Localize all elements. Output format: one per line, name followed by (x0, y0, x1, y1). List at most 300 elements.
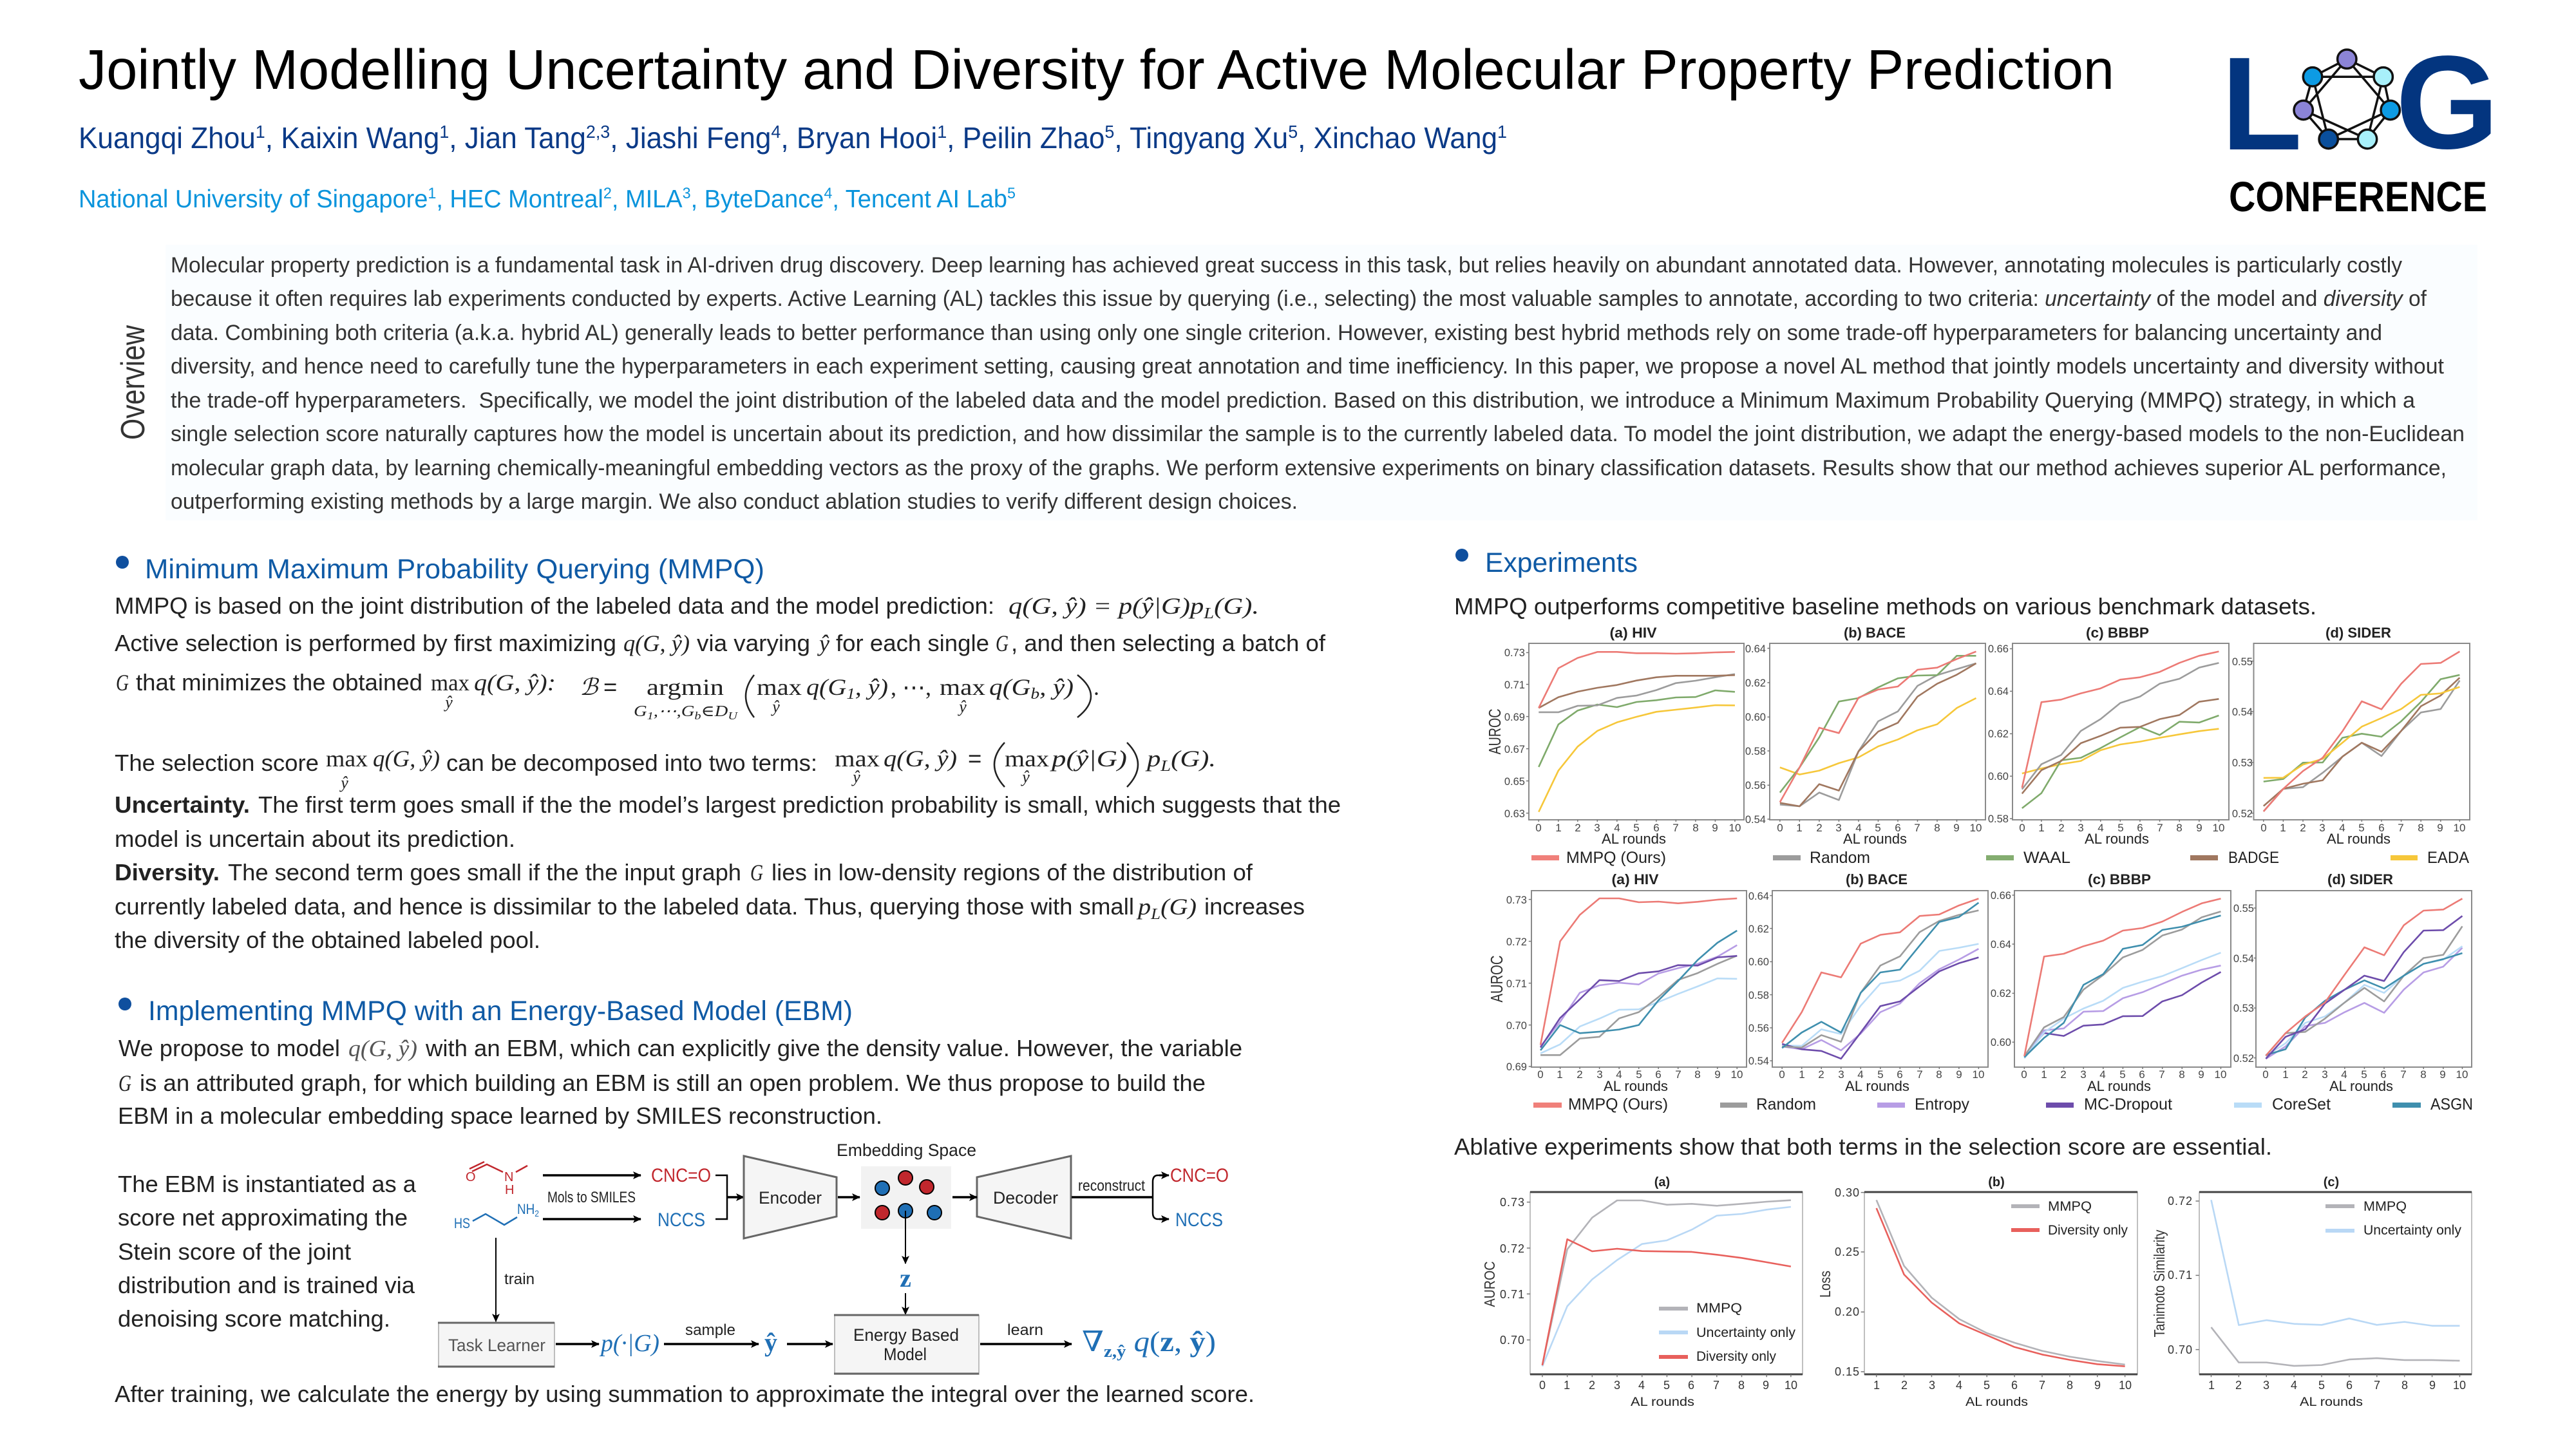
text: score net description: distribution and is trained via (118, 1272, 415, 1298)
chart: ablation c: 6 (2346, 1379, 2353, 1392)
chart: ablation b: Diversity only (2048, 1223, 2128, 1238)
chart: SIDER row 1: 9 (2437, 822, 2443, 834)
chart: BACE row 2: AL rounds (1845, 1078, 1909, 1094)
legend: row 2: MC-Dropout (2084, 1095, 2172, 1113)
energy based model box (834, 1315, 979, 1374)
overview text: outperforming existing methods by a large margin. We also conduct ablation studies to verify different design choices. (171, 489, 1298, 514)
chart: BACE row 1: 0 (1777, 822, 1783, 834)
chart: HIV row 1: AL rounds (1602, 831, 1666, 847)
text: joint distribution line: q(G, ŷ) = p(ŷ|G)p (1009, 593, 1173, 619)
authors: , Jiashi Feng (610, 121, 771, 155)
chart: HIV row 1 (1485, 625, 1744, 847)
chart: BACE row 1: 0.58 (1745, 746, 1766, 757)
formula: batch selection: . (1094, 674, 1099, 700)
formula: batch selection: max (757, 674, 802, 700)
chart: BBBP row 1: (c) BBBP (2086, 625, 2149, 641)
diagram: EBM pipeline (438, 1141, 1229, 1374)
chart: BACE row 1: 4 (1855, 822, 1862, 834)
text: joint distribution line: (G). (1214, 593, 1259, 619)
text: EBM intro: q(G, ŷ) (348, 1036, 417, 1061)
chart: SIDER row 1: 0.54 (2232, 706, 2253, 718)
formula: batch selection: argmin (647, 674, 724, 700)
chart: ablation b: 4 (1956, 1379, 1962, 1392)
text: uncertainty: The first term goes small if the the model’s largest prediction probability is small, which suggests that the (258, 791, 1341, 818)
formula: gradient: z,ŷ (1104, 1342, 1126, 1361)
legend: row 2 (1533, 1095, 2473, 1113)
chart: HIV row 2: 0.70 (1506, 1020, 1527, 1032)
chart: ablation c: 10 (2453, 1379, 2466, 1392)
smiles output: NCCS (1175, 1209, 1223, 1231)
formula: selection score decomposition: max (1005, 746, 1049, 772)
authors: Kuangqi Zhou (79, 121, 263, 155)
chart: BACE row 1: 5 (1875, 822, 1881, 834)
legend: row 2: CoreSet (2272, 1095, 2331, 1113)
chart: ablation b: 0.15 (1835, 1365, 1860, 1378)
chart: SIDER row 2: 0.52 (2233, 1053, 2254, 1065)
chart: ablation c: 2 (2235, 1379, 2242, 1392)
chart: SIDER row 2 (2233, 871, 2472, 1094)
chart: HIV row 2: 5 (1636, 1068, 1642, 1081)
decoder: Decoder (993, 1188, 1058, 1208)
chart: HIV row 2: 0.71 (1506, 978, 1527, 990)
text: EBM intro: We propose to model (118, 1035, 340, 1061)
chart: ablation a: 3 (1614, 1379, 1620, 1392)
chart: SIDER row 1: (d) SIDER (2325, 625, 2391, 641)
chart: BACE row 2: 0.58 (1748, 990, 1769, 1001)
chart: ablation c: 7 (2374, 1379, 2380, 1392)
text: EBM intro: with an EBM, which can explicitly give the density value. However, the variable (425, 1035, 1242, 1061)
text: ablative intro: Ablative experiments show that both terms in the selection score are essential. (1454, 1133, 2272, 1160)
legend: row 2: ASGN (2430, 1095, 2473, 1113)
chart: BBBP row 1: 0 (2019, 822, 2025, 834)
chart: BBBP row 1: 0.62 (1988, 728, 2009, 740)
chart: ablation a: Diversity only (1696, 1349, 1776, 1364)
chart: ablation b (1817, 1175, 2137, 1409)
chart: ablation b: 0.30 (1835, 1186, 1860, 1199)
chart: HIV row 1: 0.63 (1504, 808, 1525, 820)
chart: ablation a: 9 (1763, 1379, 1769, 1392)
chart: BACE row 2: (b) BACE (1846, 871, 1908, 887)
legend: row 1: EADA (2427, 849, 2469, 867)
text: score net description (118, 1171, 417, 1332)
chart: BACE row 2: 2 (1818, 1068, 1824, 1081)
arrow: learn (980, 1343, 1072, 1345)
icon: blue molecule: 2 (535, 1208, 539, 1218)
formula: batch selection: that minimizes the obtained (136, 669, 422, 696)
affiliations: National University of Singapore (79, 185, 437, 213)
chart: ablation a: 0 (1539, 1379, 1546, 1392)
chart: HIV row 2: 8 (1694, 1068, 1701, 1081)
formula: batch selection: 1 (647, 710, 654, 722)
chart: ablation c (2151, 1175, 2472, 1409)
text: diversity: Diversity. (115, 859, 220, 886)
chart: SIDER row 2: 0.54 (2233, 953, 2254, 965)
formula: batch selection: G (116, 670, 129, 696)
chart: ablation c: 5 (2318, 1379, 2325, 1392)
panel: MMPQ section (115, 554, 1341, 953)
chart: HIV row 1: 9 (1712, 822, 1718, 834)
chart: SIDER row 2: 6 (2380, 1068, 2387, 1081)
text: diversity: p (1138, 894, 1150, 920)
chart: BACE row 2 (1748, 871, 1988, 1094)
chart: SIDER row 1: 8 (2418, 822, 2424, 834)
formula: selection score decomposition: can be decomposed into two terms: (446, 750, 817, 776)
text: active selection line (115, 630, 1326, 656)
chart: BACE row 1: 0.60 (1745, 712, 1766, 723)
chart: BBBP row 1: 0.60 (1988, 771, 2009, 782)
chart: ablation b: 1 (1873, 1379, 1880, 1392)
authors: , Xinchao Wang (1298, 121, 1497, 155)
formula: batch selection: U (728, 710, 739, 722)
chart: BACE row 2: 6 (1897, 1068, 1903, 1081)
chart: BBBP row 2: 5 (2119, 1068, 2126, 1081)
chart: HIV row 1: 2 (1575, 822, 1581, 834)
chart: BACE row 2: 0.56 (1748, 1023, 1769, 1034)
chart: BBBP row 1: 5 (2117, 822, 2124, 834)
chart: BBBP row 1: 8 (2176, 822, 2183, 834)
chart: BACE row 2: 9 (1956, 1068, 1962, 1081)
heading: MMPQ: Minimum Maximum Probability Querying (MMPQ) (145, 554, 764, 585)
chart: HIV row 2: 9 (1714, 1068, 1721, 1081)
authors: 1 (439, 122, 449, 142)
chart: HIV row 1: 1 (1555, 822, 1562, 834)
affiliations: , Tencent AI Lab (832, 185, 1007, 213)
chart: ablation a: AUROC (1481, 1261, 1498, 1307)
chart: BBBP row 1: 0.58 (1988, 813, 2009, 825)
chart: SIDER row 2: 1 (2282, 1068, 2289, 1081)
text: active selection line: via varying (697, 630, 810, 656)
chart: BACE row 1: 0.56 (1745, 780, 1766, 791)
chart: BBBP row 2: 0.60 (1991, 1037, 2011, 1048)
text: score net description: Stein score of the joint (118, 1238, 351, 1265)
chart: SIDER row 1: 7 (2398, 822, 2404, 834)
chart: HIV row 1: AUROC (1485, 708, 1504, 755)
icon: red molecule: H (505, 1183, 514, 1197)
chart: ablation a: 6 (1688, 1379, 1694, 1392)
icon: red molecule: O (466, 1170, 476, 1184)
chart: ablation b: 7 (2039, 1379, 2045, 1392)
affiliations: , MILA (612, 185, 683, 213)
arrow: y hat to model (787, 1343, 833, 1345)
chart: BACE row 1: (b) BACE (1844, 625, 1906, 641)
heading: EBM: Implementing MMPQ with an Energy-Based Model (EBM) (148, 996, 853, 1027)
chart: SIDER row 1: 2 (2300, 822, 2306, 834)
authors: 1 (1497, 122, 1507, 142)
formula: selection score decomposition (115, 743, 1216, 792)
chart: BBBP row 1: 10 (2213, 822, 2224, 834)
smiles input: CNC=O (651, 1165, 711, 1186)
legend: row 2: Entropy (1915, 1095, 1969, 1113)
logo: LoG conference (2221, 28, 2499, 220)
heading: experiments: Experiments (1485, 547, 1638, 578)
chart: HIV row 1: 0.73 (1504, 647, 1525, 659)
formula: selection score decomposition: max (835, 746, 880, 772)
chart: BACE row 2: 0.62 (1748, 923, 1769, 935)
chart: ablation c: 0.71 (2168, 1269, 2193, 1282)
icon: blue molecule: NH (517, 1201, 538, 1217)
arrows: molecules to SMILES (543, 1175, 641, 1219)
overview text (171, 253, 2465, 514)
logo: LoG conference: G (2396, 28, 2499, 176)
formula: batch selection: max (940, 674, 985, 700)
chart: BBBP row 2 (1991, 871, 2231, 1094)
text: diversity (115, 859, 1305, 953)
chart: BBBP row 2: 9 (2198, 1068, 2204, 1081)
formula: batch selection: G (634, 703, 645, 720)
icon: blue molecule (454, 1201, 539, 1231)
chart: SIDER row 2: 0 (2262, 1068, 2269, 1081)
text: EBM intro: EBM in a molecular embedding space learned by SMILES reconstruction. (118, 1103, 882, 1129)
task learner box: Task Learner (448, 1336, 545, 1355)
chart: BBBP row 2: AL rounds (2087, 1078, 2151, 1094)
chart: ablation b: 9 (2094, 1379, 2101, 1392)
chart: SIDER row 1 (2232, 625, 2470, 847)
overview text: the trade-off hyperparameters. Specifically, we model the joint distribution of the labeled data and the model prediction. Based on this distribution, we introduce a Minimum Maximum Probability Querying (MMPQ) strategy, in which a (171, 388, 2415, 413)
chart: BBBP row 1 (1988, 625, 2229, 847)
text: uncertainty: model is uncertain about its prediction. (115, 826, 515, 852)
chart: BBBP row 1: 0.64 (1988, 686, 2009, 697)
chart: BACE row 1: 6 (1895, 822, 1901, 834)
chart: BBBP row 2: 0.62 (1991, 988, 2011, 999)
overview text: Molecular property prediction is a fundamental task in AI-driven drug discovery. Deep learning has achieved great success in this task, but relies heavily on abundant annotated data. However, annotating molecules is particularly costly (171, 253, 2402, 278)
text: diversity: (G) (1160, 894, 1197, 920)
chart: ablation c: 9 (2429, 1379, 2436, 1392)
chart: BACE row 2: 0.64 (1748, 891, 1769, 902)
smiles output: CNC=O (1170, 1165, 1229, 1186)
chart: ablation c: Uncertainty only (2363, 1223, 2461, 1238)
authors: 4 (771, 122, 781, 142)
chart: SIDER row 2: 0.53 (2233, 1003, 2254, 1014)
text: active selection line: ŷ (817, 630, 829, 656)
chart: BACE row 2: 8 (1936, 1068, 1942, 1081)
text: diversity: currently labeled data, and hence is dissimilar to the labeled data. Thus, querying those with small (115, 893, 1134, 920)
chart: BBBP row 1: 4 (2098, 822, 2104, 834)
chart: ablation a: 0.71 (1500, 1288, 1525, 1301)
overview text: because it often requires lab experiments conducted by experts. Active Learning (AL) tackles this issue by querying (i.e., selecting) the most valuable samples to annotate, according to two criteria: uncertainty of the model and diversity of (171, 287, 2427, 311)
legend: row 1: WAAL (2023, 849, 2070, 867)
chart: BACE row 2: 3 (1838, 1068, 1844, 1081)
chart: HIV row 1: 0 (1535, 822, 1542, 834)
chart: ablation c: 1 (2208, 1379, 2215, 1392)
logo: LoG conference: L (2221, 30, 2302, 178)
chart: HIV row 1: 0.65 (1504, 776, 1525, 788)
text: EBM intro (118, 1035, 1242, 1129)
formula: selection score decomposition: p (1147, 746, 1159, 772)
legend: row 1: BADGE (2228, 849, 2279, 867)
authors: , Tingyang Xu (1114, 121, 1288, 155)
text: score net description: score net approximating the (118, 1204, 408, 1231)
authors: 1 (937, 122, 947, 142)
text: diversity: G (750, 860, 763, 886)
chart: BBBP row 2: 4 (2099, 1068, 2106, 1081)
chart: BACE row 1: 2 (1816, 822, 1823, 834)
legend: row 1 (1531, 849, 2469, 867)
text: active selection line: q(G, ŷ) (623, 630, 690, 656)
chart: BACE row 2: 1 (1799, 1068, 1805, 1081)
chart: HIV row 2: 1 (1557, 1068, 1563, 1081)
symbol: z: z (900, 1264, 911, 1293)
chart: SIDER row 1: 6 (2378, 822, 2385, 834)
formula: selection score decomposition: max (326, 746, 368, 772)
chart: ablation a: 10 (1785, 1379, 1797, 1392)
overview text: data. Combining both criteria (a.k.a. hybrid AL) generally leads to better performance than using only one single criterion. However, existing best hybrid methods rely on some trade-off hyperparameters for balancing uncertainty and (171, 321, 2382, 345)
chart: ablation a: 1 (1564, 1379, 1570, 1392)
symbol: y hat: ŷ (764, 1328, 777, 1357)
text: joint distribution line: L (1203, 605, 1214, 622)
panel: EBM section (115, 996, 1255, 1407)
logo: LoG conference: CONFERENCE (2229, 173, 2487, 220)
formula: batch selection: ŷ (443, 693, 453, 712)
chart: BACE row 1 (1745, 625, 1985, 847)
chart: SIDER row 1: 4 (2339, 822, 2345, 834)
affiliations: , ByteDance (691, 185, 824, 213)
formula: batch selection: ℬ (580, 674, 600, 700)
overview text: molecular graph data, by learning chemically-meaningful embedding vectors as the proxy of the graphs. We perform extensive experiments on binary classification datasets. Results show that our method achieves superior AL performance, (171, 456, 2447, 480)
arrow: learner to distribution (556, 1343, 599, 1345)
chart: HIV row 1: 0.67 (1504, 744, 1525, 755)
affiliations: , HEC Montreal (436, 185, 603, 213)
chart group: row 2 (1487, 871, 2473, 1113)
authors: 1 (256, 122, 265, 142)
chart: SIDER row 1: 0.53 (2232, 757, 2253, 769)
chart: BBBP row 2: 2 (2060, 1068, 2067, 1081)
authors: , Peilin Zhao (947, 121, 1104, 155)
chart: ablation a: AL rounds (1631, 1396, 1694, 1409)
chart: HIV row 1: 4 (1614, 822, 1620, 834)
chart: BACE row 2: 0.60 (1748, 956, 1769, 968)
formula: batch selection: , ⋯, (891, 674, 931, 700)
arrow: z to energy model (905, 1293, 906, 1314)
chart: SIDER row 2: 5 (2361, 1068, 2367, 1081)
authors: 5 (1104, 122, 1114, 142)
chart: HIV row 1: 8 (1692, 822, 1699, 834)
smiles output (1170, 1165, 1229, 1231)
decoder (977, 1156, 1071, 1238)
chart: ablation a: (a) (1654, 1175, 1670, 1189)
affiliations: 2 (603, 185, 612, 202)
text: diversity: increases (1204, 893, 1305, 920)
chart: BACE row 1: 0.54 (1745, 814, 1766, 826)
chart: BBBP row 2: 10 (2215, 1068, 2226, 1081)
panel: experiments section (1454, 547, 2473, 1409)
chart: ablation b: 6 (2011, 1379, 2018, 1392)
legend: row 1: Random (1810, 849, 1870, 867)
icon: graph network (2294, 50, 2400, 149)
text: EBM intro: G (118, 1070, 131, 1096)
affiliations: 3 (683, 185, 691, 202)
energy based model box: Energy Based (853, 1325, 959, 1345)
chart: BACE row 1: 9 (1953, 822, 1960, 834)
chart: HIV row 2: 4 (1616, 1068, 1622, 1081)
chart: BBBP row 1: 9 (2196, 822, 2202, 834)
chart: ablation c: AL rounds (2300, 1396, 2363, 1409)
chart: BACE row 2: 4 (1857, 1068, 1864, 1081)
text: experiments intro: MMPQ outperforms competitive baseline methods on various benchmark datasets. (1454, 593, 2316, 620)
chart: BBBP row 2: 0.66 (1991, 890, 2011, 902)
chart: HIV row 2: 6 (1655, 1068, 1662, 1081)
affiliations: 4 (824, 185, 832, 202)
chart: HIV row 2: (a) HIV (1611, 871, 1659, 887)
chart: ablation a: 0.73 (1500, 1196, 1525, 1209)
chart: HIV row 2: 7 (1675, 1068, 1681, 1081)
chart: SIDER row 1: 10 (2454, 822, 2465, 834)
label: train: train (504, 1271, 535, 1288)
formula: batch selection: ŷ (770, 697, 780, 716)
authors: 5 (1288, 122, 1298, 142)
chart: HIV row 1: 5 (1633, 822, 1640, 834)
chart: BBBP row 1: AL rounds (2085, 831, 2149, 847)
text: uncertainty: Uncertainty. (115, 791, 250, 818)
chart: BBBP row 1: 6 (2137, 822, 2143, 834)
chart: BBBP row 1: 1 (2038, 822, 2045, 834)
chart: HIV row 1: 6 (1653, 822, 1660, 834)
formula: gradient: (z, ŷ) (1150, 1326, 1215, 1358)
chart: ablation c: 4 (2291, 1379, 2297, 1392)
arrow: sample (664, 1343, 759, 1345)
chart: ablation b: (b) (1988, 1175, 2005, 1189)
chart: ablation b: 0.20 (1835, 1305, 1860, 1318)
chart: BBBP row 1: 0.66 (1988, 643, 2009, 655)
chart: HIV row 2: 0 (1537, 1068, 1544, 1081)
authors: , Jian Tang (449, 121, 586, 155)
chart: BACE row 1: AL rounds (1843, 831, 1907, 847)
chart: SIDER row 1: 0.55 (2232, 656, 2253, 668)
formula: batch selection: q(G (806, 674, 842, 700)
chart: SIDER row 2: 8 (2420, 1068, 2427, 1081)
chart: ablation a: MMPQ (1696, 1301, 1742, 1316)
energy based model box: Model (884, 1345, 927, 1364)
formula: selection score decomposition: ŷ (1020, 768, 1030, 786)
chart: BBBP row 2: 7 (2159, 1068, 2165, 1081)
affiliations: 5 (1007, 185, 1016, 202)
label: embedding space: Embedding Space (837, 1141, 976, 1160)
chart: SIDER row 2: 2 (2302, 1068, 2308, 1081)
formula: selection score decomposition: L (1160, 758, 1171, 775)
chart: BACE row 2: 7 (1917, 1068, 1923, 1081)
chart: BBBP row 2: 1 (2041, 1068, 2047, 1081)
chart: BACE row 1: 8 (1934, 822, 1940, 834)
formula: batch selection: b (694, 710, 701, 722)
chart: BBBP row 2: (c) BBBP (2088, 871, 2151, 887)
encoder (744, 1156, 837, 1238)
chart: SIDER row 2: 0.55 (2233, 903, 2254, 914)
chart: ablation a: 2 (1589, 1379, 1595, 1392)
embedding space dots (861, 1166, 951, 1229)
text: joint distribution line: MMPQ is based on the joint distribution of the labeled data and the model prediction: (115, 592, 994, 619)
formula: selection score decomposition: The selection score (115, 750, 319, 776)
arrow: train (495, 1238, 497, 1321)
text: joint distribution line (115, 592, 1259, 622)
chart: ablation b: 8 (2067, 1379, 2073, 1392)
formula: batch selection: ∈D (701, 703, 728, 720)
chart: HIV row 2: 0.73 (1506, 895, 1527, 906)
chart: ablation b: MMPQ (2048, 1199, 2092, 1214)
chart: ablation c: 8 (2401, 1379, 2408, 1392)
chart: HIV row 1: 0.71 (1504, 679, 1525, 691)
legend: row 2: Random (1756, 1095, 1816, 1113)
smiles input: NCCS (658, 1209, 705, 1231)
chart: ablation c: MMPQ (2363, 1199, 2407, 1214)
text: active selection line: G (996, 630, 1009, 656)
chart: ablation a: 0.72 (1500, 1242, 1525, 1255)
chart: BACE row 1: 1 (1796, 822, 1803, 834)
chart: ablation a: Uncertainty only (1696, 1325, 1796, 1340)
chart: ablation b: AL rounds (1965, 1396, 2028, 1409)
chart: HIV row 2: 3 (1596, 1068, 1603, 1081)
legend: row 1: MMPQ (Ours) (1566, 849, 1666, 867)
symbol: p: p(·|G) (599, 1330, 659, 1357)
formula: gradient: q (1126, 1326, 1150, 1358)
